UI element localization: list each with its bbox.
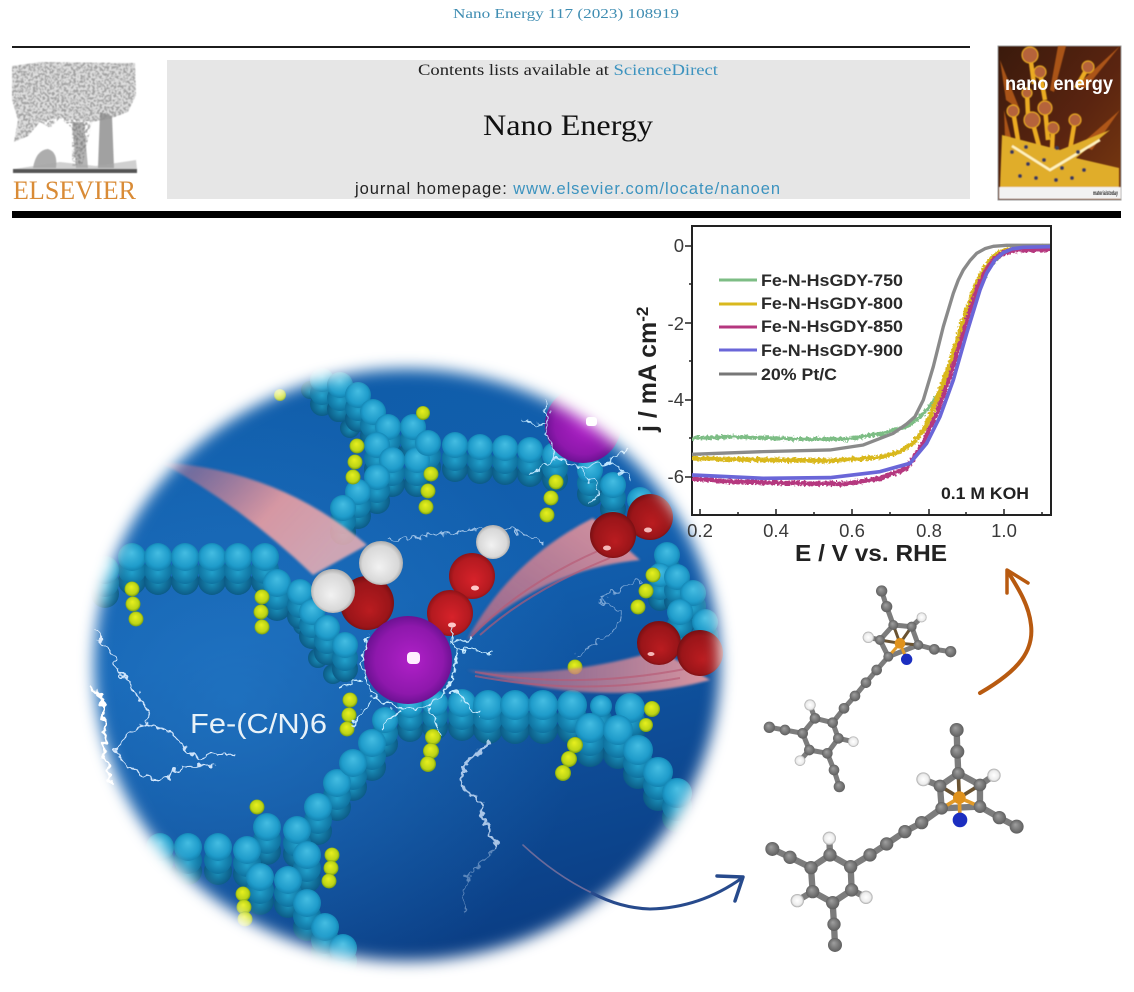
x tick labels xyxy=(687,520,1017,541)
water molecule xyxy=(311,541,403,630)
Elsevier logo xyxy=(12,62,137,205)
curve: 900 xyxy=(692,247,1051,478)
axis ticks xyxy=(685,246,1042,515)
cover stalks xyxy=(1013,55,1088,150)
y tick labels: -6 xyxy=(668,466,684,487)
y tick labels: 0 xyxy=(674,235,684,256)
y tick labels xyxy=(668,235,684,487)
y axis title: j / mA cm xyxy=(634,322,662,432)
thick rule xyxy=(12,211,1121,218)
graphyne framework xyxy=(91,368,718,986)
x tick labels: 1.0 xyxy=(991,520,1017,541)
y axis title: -2 xyxy=(633,307,652,322)
x axis title: E / V vs. RHE xyxy=(795,540,947,566)
reaction trails xyxy=(160,462,710,693)
legend: Fe-N-HsGDY-750 xyxy=(761,272,903,290)
curve: 850 xyxy=(692,249,1051,484)
panel: Fe-(C/N)6 catalyst circular illustration xyxy=(82,356,732,974)
yellow-green dopant atoms xyxy=(124,389,660,926)
bonds xyxy=(769,591,951,787)
arrow: orange to chart xyxy=(980,570,1031,693)
tree xyxy=(12,62,137,173)
plot frame xyxy=(692,226,1051,515)
arrow: blue to molecule xyxy=(523,845,743,909)
chart: LSV polarization curves xyxy=(633,226,1051,566)
citation line: Nano Energy 117 (2023) 108919 xyxy=(453,6,679,21)
molecular model upper xyxy=(764,585,956,792)
legend: Fe-N-HsGDY-850 xyxy=(761,318,903,336)
dark under-layer spheres xyxy=(293,381,360,684)
grey title band xyxy=(167,60,970,199)
legend: 20% Pt/C xyxy=(761,366,837,384)
wordmark: ELSEVIER xyxy=(13,176,137,205)
x tick labels: 0.2 xyxy=(687,520,713,541)
cover discs xyxy=(1007,47,1094,134)
label: Fe-(C/N)6: Fe-(C/N)6 xyxy=(190,708,327,739)
x tick labels: 0.8 xyxy=(916,520,942,541)
cover title: nano energy xyxy=(1005,74,1113,95)
blue background xyxy=(82,356,732,974)
curves xyxy=(692,245,1051,484)
homepage line: journal homepage: www.elsevier.com/locate/nanoen xyxy=(354,180,780,198)
cover flares xyxy=(1000,46,1120,165)
legend xyxy=(719,272,903,384)
Fe atom top xyxy=(521,396,631,504)
Fe atom centre xyxy=(338,616,495,735)
OOH intermediate xyxy=(427,525,510,636)
lightning bolts xyxy=(88,528,640,913)
curve: 800 xyxy=(692,247,1051,461)
journal cover xyxy=(998,46,1121,200)
legend: Fe-N-HsGDY-800 xyxy=(761,295,903,313)
legend: Fe-N-HsGDY-900 xyxy=(761,342,903,360)
oxygen molecule upper xyxy=(590,494,673,558)
electrolyte label: 0.1 M KOH xyxy=(941,485,1029,503)
journal title: Nano Energy xyxy=(483,109,653,142)
bonds xyxy=(772,730,1017,945)
curve: 750 xyxy=(692,256,1003,443)
atoms xyxy=(765,723,1024,952)
x tick labels: 0.6 xyxy=(839,520,865,541)
oxygen molecule lower xyxy=(637,621,723,676)
y tick labels: -4 xyxy=(668,389,684,410)
contents line: Contents lists available at ScienceDirect xyxy=(418,62,719,79)
y tick labels: -2 xyxy=(668,313,684,334)
molecular model lower xyxy=(765,723,1024,952)
atoms xyxy=(764,585,956,792)
journal header xyxy=(12,46,970,199)
cover mat xyxy=(1000,130,1119,187)
curve: Pt/C xyxy=(692,245,1051,454)
x tick labels: 0.4 xyxy=(763,520,789,541)
